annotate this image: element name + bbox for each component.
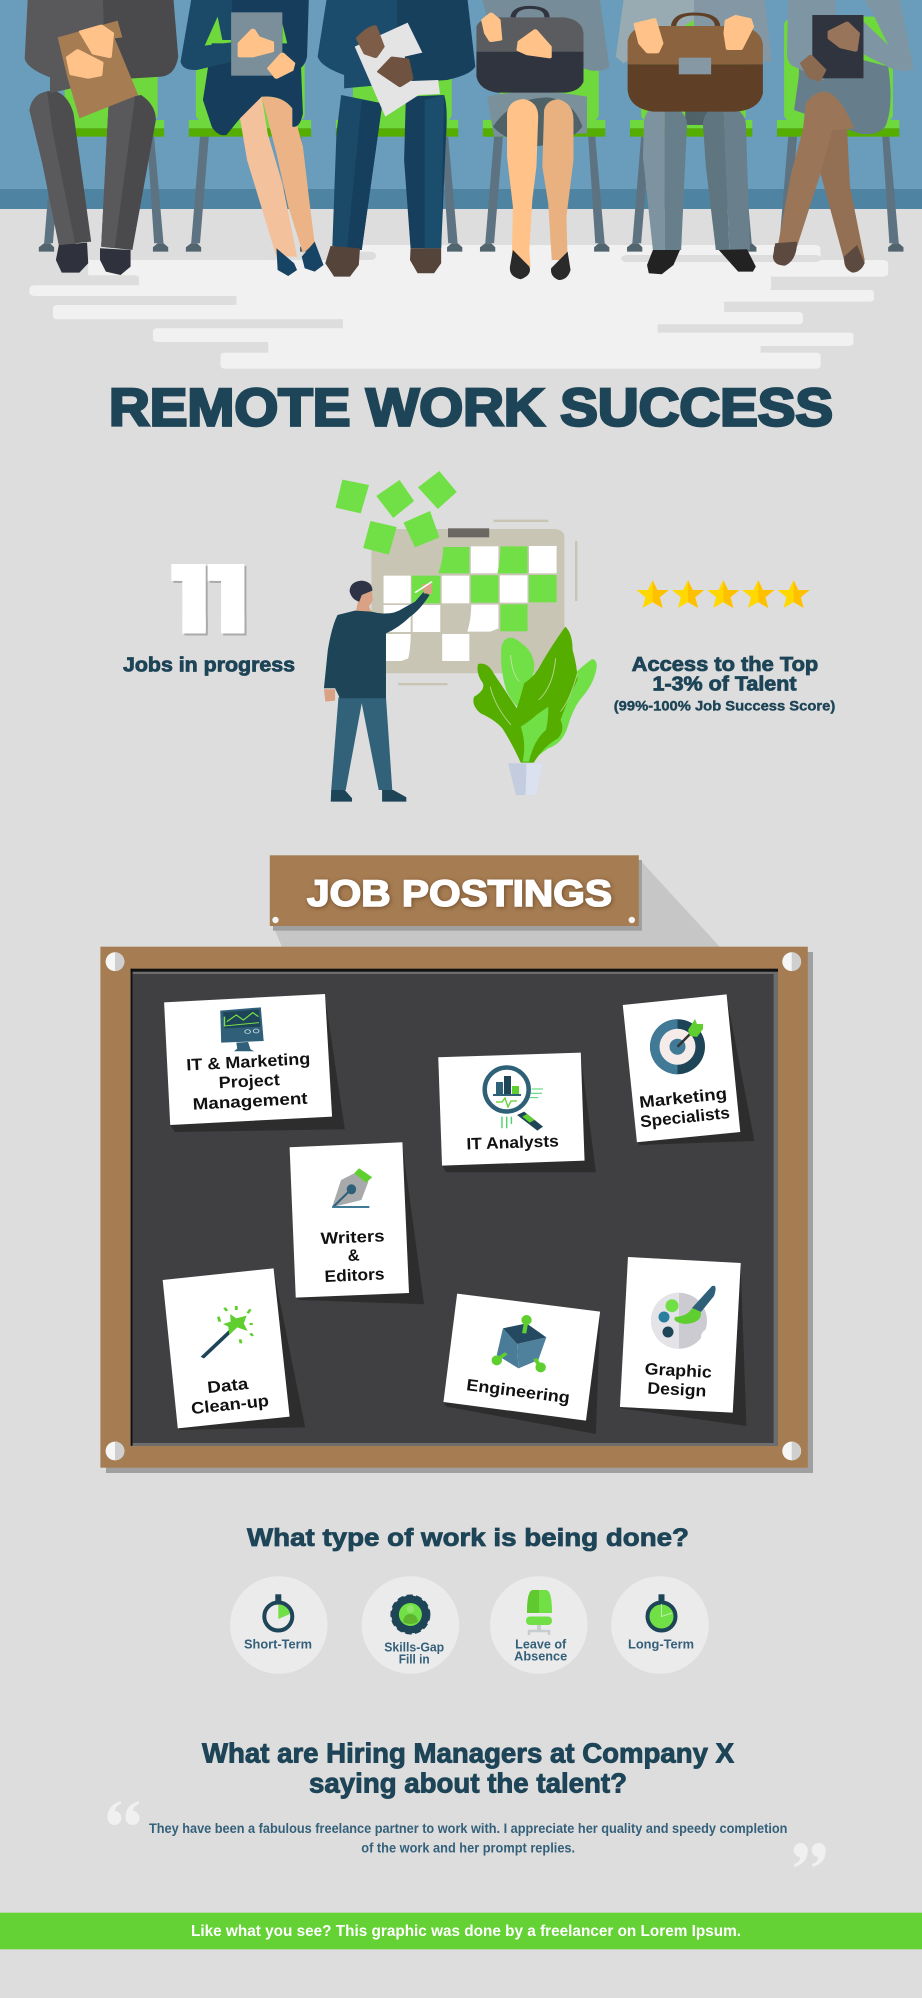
leave of absence: Absence bbox=[514, 1650, 567, 1664]
leave of absence: Leave of bbox=[515, 1638, 567, 1652]
icon: cube with pins bbox=[492, 1315, 546, 1372]
stat: access to top talent: 1-3% of Talent bbox=[652, 674, 797, 696]
skills-gap fill in bbox=[362, 1576, 459, 1674]
corner pins bbox=[106, 952, 801, 1460]
note: Data Clean-up bbox=[163, 1268, 305, 1430]
calendar board bbox=[371, 520, 577, 685]
icon: magnifier analytics bbox=[485, 1068, 543, 1131]
note: Marketing Specialists bbox=[623, 994, 754, 1145]
skills-gap fill in: Skills-Gap bbox=[384, 1641, 445, 1655]
person 5: brown bag bbox=[616, 0, 772, 274]
icon: dart target bbox=[650, 1019, 705, 1074]
heading: hiring managers: saying about the talent? bbox=[309, 1767, 627, 1798]
note: Writers & Editors: Writers bbox=[320, 1227, 385, 1248]
illustration: man placing sticky notes on calendar, plant bbox=[324, 471, 597, 802]
floor light patches bbox=[29, 245, 888, 369]
testimonial text bbox=[149, 1821, 787, 1856]
note: IT Analysts bbox=[438, 1053, 596, 1172]
short-term bbox=[230, 1576, 328, 1674]
note: Marketing Specialists: Specialists bbox=[639, 1104, 731, 1131]
footer banner bbox=[0, 1913, 922, 1949]
note: Writers & Editors: Editors bbox=[324, 1265, 385, 1286]
bulletin board bbox=[100, 947, 813, 1473]
heading: hiring managers bbox=[202, 1737, 735, 1798]
note: IT & Marketing Project Management bbox=[164, 994, 345, 1132]
title: REMOTE WORK SUCCESS bbox=[109, 379, 833, 438]
chairs bbox=[39, 17, 903, 252]
note: IT & Marketing Project Management: Management bbox=[192, 1090, 309, 1114]
note: IT & Marketing Project Management: Project bbox=[218, 1071, 281, 1092]
note: Graphic Design: Graphic bbox=[644, 1360, 712, 1382]
stat: access to top talent: (99%-100% Job Success Score) bbox=[614, 698, 835, 714]
person 6: tablet and crossed legs bbox=[773, 0, 913, 273]
person 2: navy dress with tablet bbox=[181, 0, 324, 276]
short-term: Short-Term bbox=[244, 1637, 312, 1651]
note: Engineering bbox=[443, 1294, 600, 1434]
sign heading: JOB POSTINGS bbox=[307, 873, 612, 914]
footer banner: Like what you see? This graphic was done by a freelancer on Lorem Ipsum. bbox=[191, 1923, 741, 1940]
note: IT Analysts: IT Analysts bbox=[466, 1132, 559, 1154]
note: Data Clean-up: Clean-up bbox=[190, 1392, 270, 1418]
testimonial text: of the work and her prompt replies. bbox=[361, 1841, 575, 1856]
note: IT & Marketing Project Management: IT & Marketing bbox=[186, 1050, 311, 1075]
icon: closing quote mark bbox=[794, 1843, 826, 1867]
icon: palette and brush bbox=[651, 1286, 717, 1349]
man bbox=[324, 581, 432, 802]
note: Writers & Editors: & bbox=[347, 1246, 360, 1265]
jobs label: Jobs in progress bbox=[123, 654, 295, 676]
person 4: dark bag and bare legs bbox=[476, 0, 609, 280]
note: Graphic Design bbox=[620, 1257, 746, 1426]
long-term: Long-Term bbox=[628, 1638, 694, 1652]
leave of absence bbox=[490, 1576, 588, 1674]
work types bbox=[230, 1576, 709, 1674]
person 1: grey suit with folder bbox=[25, 0, 178, 275]
note: Marketing Specialists: Marketing bbox=[638, 1085, 728, 1112]
icon: monitor chart bbox=[220, 1007, 264, 1051]
icon: pen nib bbox=[332, 1168, 372, 1207]
big number 11 bbox=[171, 564, 246, 636]
stat: access to top talent bbox=[614, 654, 835, 714]
note: Engineering: Engineering bbox=[465, 1376, 571, 1407]
stat: jobs in progress bbox=[123, 552, 295, 676]
long-term bbox=[611, 1576, 709, 1674]
heading: hiring managers: What are Hiring Managers at Company X bbox=[202, 1737, 735, 1768]
skills-gap fill in: Fill in bbox=[399, 1653, 430, 1667]
heading: type of work: What type of work is being done? bbox=[247, 1524, 689, 1552]
note: Graphic Design: Design bbox=[647, 1379, 707, 1401]
note: Writers & Editors bbox=[290, 1142, 424, 1304]
note: Data Clean-up: Data bbox=[206, 1375, 250, 1397]
job postings sign bbox=[270, 855, 720, 947]
big number 11: 11 bbox=[172, 552, 250, 646]
person 3: navy suit with paper bbox=[318, 0, 475, 277]
icon: opening quote mark bbox=[107, 1801, 140, 1825]
icon: magic wand bbox=[202, 1306, 253, 1358]
hero illustration: people waiting on chairs bbox=[0, 0, 922, 369]
testimonial text: They have been a fabulous freelance partner to work with. I appreciate her quality and speedy completion bbox=[149, 1821, 787, 1836]
stat: access to top talent: Access to the Top bbox=[632, 654, 818, 676]
plant in vase bbox=[473, 627, 597, 795]
stars rating bbox=[637, 580, 810, 608]
floating green sticky notes bbox=[336, 471, 457, 555]
